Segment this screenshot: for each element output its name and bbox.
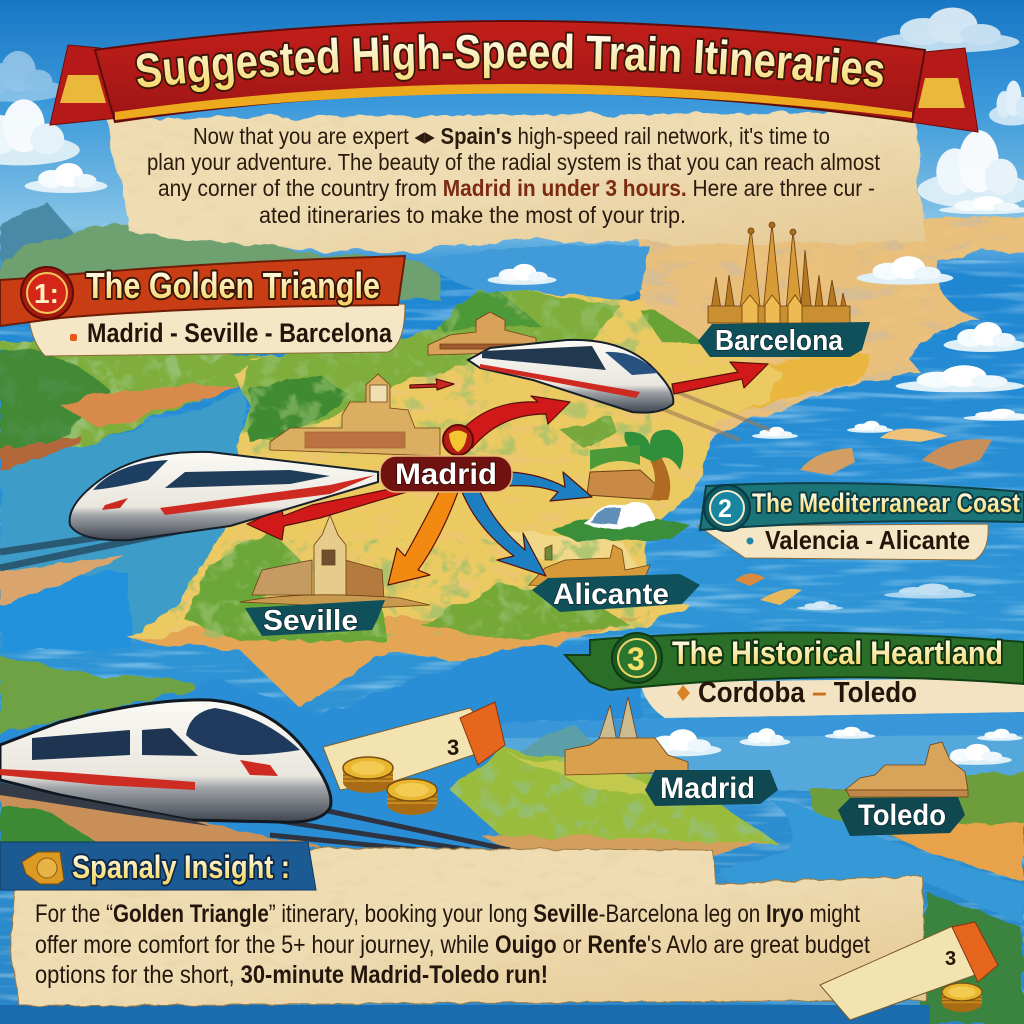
panel: itinerary 1 [0,256,405,356]
banner: itinerary 1 [0,256,405,326]
pill: route 3 [640,678,1024,718]
panel: insight [0,842,930,1010]
pill: route 2 [698,524,988,560]
map: Spain mainland [130,275,790,710]
arrow: Madrid to Seville south [388,490,458,585]
train: left, mid [70,452,378,540]
bullet 3 [677,685,690,701]
arrow: Madrid to Valencia [508,472,592,501]
landmark: Madrid palace [270,374,440,456]
label: Alicante: Alicante [553,578,669,611]
label: Barcelona: Barcelona [715,325,844,357]
intro paragraph: any corner of the country from Madrid in under 3 hours. Here are three cur - [158,175,875,201]
intro paragraph: ated itineraries to make the most of your trip. [259,202,686,228]
intro paragraph [147,123,881,228]
lower sea with ripples [0,640,1024,860]
panel: itinerary 2 [698,483,1024,560]
arrow: Madrid to Seville west [247,488,420,540]
label: Toledo [838,797,965,836]
ribbon body [95,21,925,122]
ribbon tail: left [50,45,118,125]
sea window with clouds [420,245,953,306]
insight body text: offer more comfort for the 5+ hour journey, while Ouigo or Renfe's Avlo are great budget [35,931,870,959]
medallion 3 [612,633,662,683]
land: lower right shore [810,770,1024,880]
ticket and coin, bottom right: 3 [945,948,956,970]
outer sea details: rocks and waves [735,322,1024,610]
arrow: small north [410,379,454,390]
arrow: Madrid to Alicante [462,492,546,576]
north land: tan coast of Spain [640,215,1024,475]
arrow: Madrid to Barcelona [462,396,570,448]
insight body text: For the “Golden Triangle” itinerary, booking your long Seville-Barcelona leg on Iryo might [35,900,860,928]
ticket and coins: 3 [447,735,459,760]
label: Alicante [532,574,700,612]
label: Madrid hub with pin [380,425,512,492]
medallion 3: 3 [627,641,645,677]
clouds: sky [0,8,1024,214]
mountains and hills, upper left [0,200,440,300]
route 2 text: Valencia - Alicante [765,525,970,555]
route arrows [247,362,768,585]
parchment: intro panel [100,110,930,260]
route 3 text: Cordoba – Toledo [698,677,917,709]
sea ripples [0,260,1024,1024]
sea: left water [0,392,245,650]
label: Madrid lower: Madrid [660,772,755,805]
parchment: insight panel [0,845,930,1010]
landmark: Toledo [845,742,968,797]
banner: itinerary 2 [700,483,1024,530]
icon: seal [22,852,64,884]
title text: Suggested High-Speed Train Itineraries [135,32,885,94]
label: Toledo: Toledo [858,799,946,832]
label: Seville [245,600,385,637]
medallion 1: 1: [34,278,59,309]
route 1 text: Madrid - Seville - Barcelona [87,318,393,348]
title ribbon [49,20,979,133]
ticket and coins [323,702,505,815]
ribbon tail: right [910,48,978,132]
pill: route 1 [28,304,405,356]
land: lower left ground and track [0,385,770,850]
banner: insight [0,842,316,890]
panel: itinerary 3 [565,632,1024,718]
landmark: Valencia arts complex [552,502,690,540]
land: lower central hill [440,745,790,858]
river: lower right [720,800,1024,925]
land: upper left green bank [0,340,260,470]
train: bottom left [0,700,331,826]
landmark: Alicante [529,545,650,590]
banner: itinerary 3 [565,632,1024,690]
label: Seville: Seville [263,605,358,637]
intro paragraph: Now that you are expert ◂▸ Spain's high-speed rail network, it's time to [193,123,830,149]
medallion 2: 2 [718,495,732,523]
intro paragraph: plan your adventure. The beauty of the radial system is that you can reach almost [147,149,881,175]
right lower green corner [920,890,1024,1024]
bottom sea strip [0,1005,930,1024]
landmark: Seville Giralda [240,515,430,608]
heading: insight: Spanaly Insight : [72,849,290,885]
landmark: northern palace [428,312,536,355]
heading 1: The Golden Triangle [86,265,380,306]
bullet 1 [70,334,77,341]
insight body text: options for the short, 30-minute Madrid-Toledo run! [35,961,548,989]
label: Madrid lower [645,770,778,806]
arrow: beyond train to Barcelona [672,362,768,394]
train: top right [468,340,673,413]
medallion 1 [21,267,73,319]
medallion 2 [704,485,750,531]
ticket and coin, bottom right [820,922,998,1020]
landmark: lower Madrid cathedral [565,697,688,775]
insight body text [35,900,870,989]
landmark: Sagrada Familia, Barcelona [708,222,850,323]
bullet 2 [746,538,754,544]
landmark: Valencia with palm [587,430,683,500]
land: lower left hill [0,655,200,750]
label: Madrid hub with pin: Madrid [395,458,497,491]
